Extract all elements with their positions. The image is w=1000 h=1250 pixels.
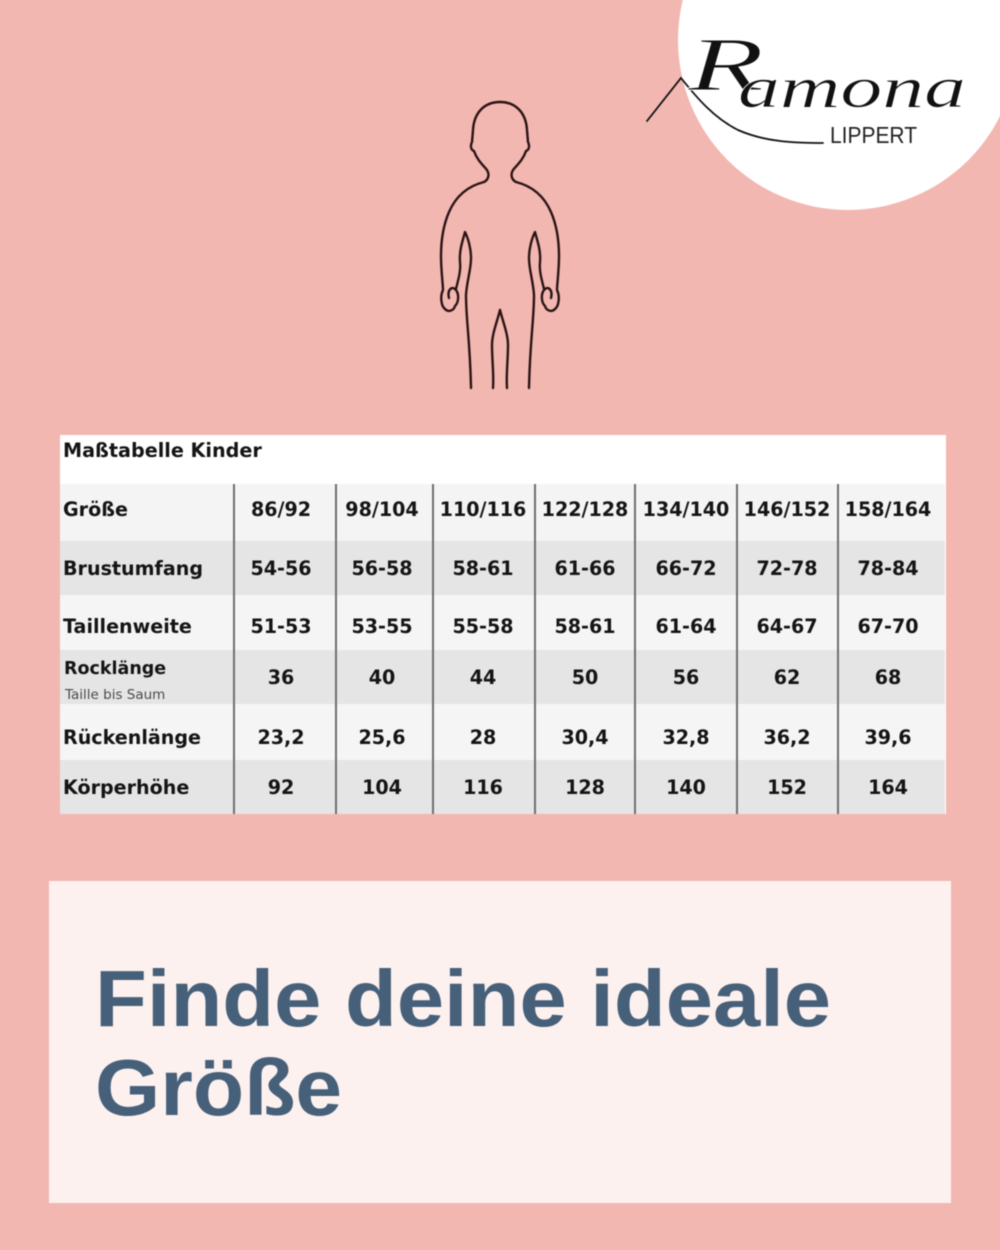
row: Rocklänge: 40 bbox=[369, 666, 395, 689]
row: Rückenlänge: 28 bbox=[470, 726, 496, 749]
row: Taillenweite bbox=[63, 615, 919, 638]
row: Körperhöhe: 104 bbox=[362, 776, 402, 799]
row: Körperhöhe: 164 bbox=[868, 776, 908, 799]
row: Körperhöhe: 128 bbox=[565, 776, 605, 799]
row: Brustumfang: 61-66 bbox=[554, 557, 616, 580]
row: Körperhöhe: 152 bbox=[767, 776, 807, 799]
row: Taillenweite: 55-58 bbox=[452, 615, 514, 638]
row: Taillenweite: 61-64 bbox=[655, 615, 717, 638]
row: Rückenlänge: 25,6 bbox=[358, 726, 406, 749]
row: Größe: 134/140 bbox=[643, 498, 729, 521]
row: Taillenweite: 64-67 bbox=[756, 615, 818, 638]
row: Größe: 110/116 bbox=[440, 498, 526, 521]
row: Rocklänge: 36 bbox=[268, 666, 294, 689]
row: Rückenlänge: 36,2 bbox=[763, 726, 811, 749]
row: Brustumfang: 66-72 bbox=[655, 557, 717, 580]
row: Rückenlänge: 32,8 bbox=[662, 726, 710, 749]
row: Rocklänge: 68 bbox=[875, 666, 901, 689]
row: Rückenlänge: Rückenlänge bbox=[63, 726, 201, 749]
row: Brustumfang: 78-84 bbox=[857, 557, 919, 580]
row: Taillenweite: 51-53 bbox=[250, 615, 312, 638]
row: Brustumfang: 72-78 bbox=[756, 557, 818, 580]
logo: Ramona Lippert bbox=[647, 0, 1000, 210]
row: Rückenlänge bbox=[63, 726, 912, 749]
heading: Größe bbox=[95, 1043, 342, 1132]
heading bbox=[95, 954, 831, 1132]
logo: Ramona Lippert: LIPPERT bbox=[830, 122, 917, 148]
icon: child body outline bbox=[441, 102, 559, 388]
row: Rocklänge: Rocklänge bbox=[64, 659, 166, 679]
logo: Ramona Lippert: amona bbox=[738, 55, 966, 120]
row: Körperhöhe: 116 bbox=[463, 776, 503, 799]
row: Rocklänge: 56 bbox=[673, 666, 699, 689]
row: Körperhöhe: 140 bbox=[666, 776, 706, 799]
row: Größe: 146/152 bbox=[744, 498, 830, 521]
row: Brustumfang bbox=[63, 557, 919, 580]
row: Taillenweite: 67-70 bbox=[857, 615, 919, 638]
row: Taillenweite: Taillenweite bbox=[63, 615, 192, 638]
row: Größe bbox=[63, 498, 931, 521]
row: Taillenweite: 53-55 bbox=[351, 615, 413, 638]
row: Größe: 86/92 bbox=[251, 498, 311, 521]
row: Körperhöhe: 92 bbox=[268, 776, 294, 799]
heading: Finde deine ideale bbox=[95, 954, 831, 1043]
size table bbox=[60, 435, 946, 814]
row: Größe: Größe bbox=[63, 498, 128, 521]
row: Rocklänge: Taille bis Saum bbox=[64, 687, 165, 703]
row: Körperhöhe: Körperhöhe bbox=[63, 776, 189, 799]
row: Brustumfang: 56-58 bbox=[351, 557, 413, 580]
logo: Ramona Lippert: R bbox=[686, 23, 764, 107]
row: Rocklänge: 50 bbox=[572, 666, 598, 689]
row: Brustumfang: 58-61 bbox=[452, 557, 514, 580]
row: Rückenlänge: 23,2 bbox=[257, 726, 305, 749]
row: Brustumfang: 54-56 bbox=[250, 557, 312, 580]
row: Rückenlänge: 30,4 bbox=[561, 726, 609, 749]
row: Größe: 98/104 bbox=[345, 498, 419, 521]
table title: Maßtabelle Kinder bbox=[63, 439, 262, 462]
panel: headline bbox=[49, 881, 951, 1203]
row: Rocklänge: 62 bbox=[774, 666, 800, 689]
row: Rückenlänge: 39,6 bbox=[864, 726, 912, 749]
row: Brustumfang: Brustumfang bbox=[63, 557, 203, 580]
row: Körperhöhe bbox=[63, 776, 908, 799]
row: Rocklänge: 44 bbox=[470, 666, 496, 689]
row: Taillenweite: 58-61 bbox=[554, 615, 616, 638]
row: Rocklänge bbox=[64, 659, 901, 703]
row: Größe: 158/164 bbox=[845, 498, 931, 521]
row: Größe: 122/128 bbox=[542, 498, 628, 521]
